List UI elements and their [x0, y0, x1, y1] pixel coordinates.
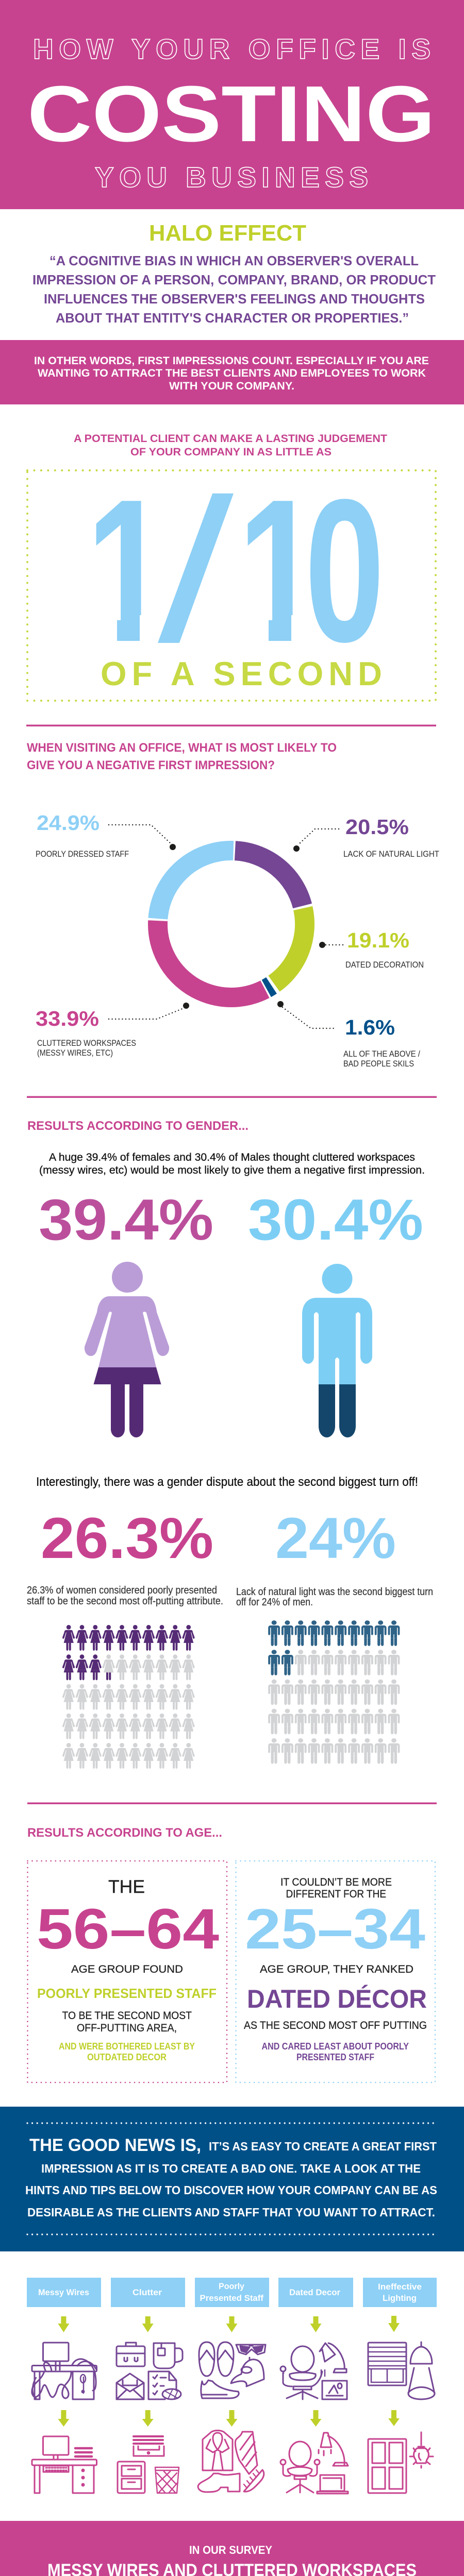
callout: poorly dressed staff: POORLY DRESSED STAFF	[36, 850, 129, 859]
text block: women second turn off	[27, 1585, 223, 1607]
callout: all of the above	[277, 1001, 420, 1069]
panel: header banner	[0, 0, 464, 209]
icon: tidy storage	[118, 2436, 179, 2493]
callout: poorly dressed staff	[36, 811, 176, 859]
heading: how your office is: HOW YOUR OFFICE IS	[33, 33, 430, 65]
callout: all of the above: 1.6%	[345, 1015, 395, 1039]
text block: potential client	[74, 433, 387, 458]
label box: clutter	[111, 2278, 185, 2307]
callout: poorly dressed staff: 24.9%	[37, 811, 100, 835]
icon: smart clothing	[198, 2431, 264, 2492]
icon: clutter items	[117, 2343, 183, 2399]
big number: 1/10: 1	[86, 456, 169, 684]
panel: one tenth of a second	[27, 456, 436, 701]
heading: costing: COSTING	[27, 70, 435, 158]
stat: female 39.4%: 39.4%	[39, 1188, 213, 1252]
text block: halo effect definition: “A COGNITIVE BIAS IN WHICH AN OBSERVER'S OVERALL	[49, 253, 419, 268]
big number: 1/10: 0	[305, 456, 385, 684]
panel: age group 25-34: AGE GROUP, THEY RANKED	[260, 1963, 413, 1975]
text block: halo effect definition: IMPRESSION OF A PERSON, COMPANY, BRAND, OR PRODUCT	[32, 272, 436, 287]
donut chart	[129, 822, 333, 1026]
panel: age group 25-34: PRESENTED STAFF	[296, 2052, 374, 2062]
label box: poorly presented staff: Poorly	[219, 2281, 245, 2291]
heading: results according to gender: RESULTS ACCORDING TO GENDER...	[27, 1119, 248, 1133]
text block: men second turn off: off for 24% of men.	[236, 1597, 313, 1608]
icon: messy wires desk	[32, 2343, 97, 2399]
big number: 1/10: 1	[238, 456, 320, 684]
panel: the good news band	[0, 2107, 464, 2251]
panel: age group 56-64: OFF-PUTTING AREA,	[77, 2022, 177, 2034]
text block: halo effect definition	[32, 253, 436, 326]
icon: bright window and bulb	[368, 2432, 433, 2493]
stat: 56-64: 56–64	[37, 1897, 219, 1961]
callout: dated decoration: DATED DECORATION	[345, 960, 424, 970]
text: the good news: THE GOOD NEWS IS,	[29, 2136, 201, 2155]
icon: tidy desk	[32, 2436, 97, 2493]
label box: dated decor: Dated Decor	[289, 2287, 340, 2297]
label box: messy wires: Messy Wires	[38, 2287, 89, 2297]
callout: lack of natural light	[293, 815, 439, 859]
panel: first impressions band	[0, 340, 464, 404]
label box: clutter: Clutter	[132, 2287, 162, 2297]
panel: age group 56-64: TO BE THE SECOND MOST	[62, 2010, 192, 2022]
text block: gender intro: (messy wires, etc) would be most likely to give them a negative first impression.	[39, 1164, 425, 1176]
text block: men second turn off	[236, 1586, 433, 1608]
text block: women second turn off: 26.3% of women considered poorly presented	[27, 1585, 217, 1596]
text block: halo effect definition: INFLUENCES THE OBSERVER'S FEELINGS AND THOUGHTS	[44, 291, 425, 307]
panel: the good news band: DESIRABLE AS THE CLIENTS AND STAFF THAT YOU WANT TO ATTRACT.	[27, 2206, 435, 2219]
caption: of a second: OF A SECOND	[101, 655, 382, 692]
panel: age group 56-64: AGE GROUP FOUND	[71, 1963, 183, 1975]
icon: casual clothing	[199, 2342, 266, 2398]
callout: all of the above: ALL OF THE ABOVE /	[343, 1049, 420, 1059]
text block: potential client: A POTENTIAL CLIENT CAN MAKE A LASTING JUDGEMENT	[74, 433, 387, 445]
panel: survey result band	[0, 2521, 464, 2576]
stat: women 26.3%: 26.3%	[41, 1506, 213, 1570]
panel: age group 56-64	[28, 1861, 227, 2082]
arrows: purple icons to pink icons	[58, 2410, 400, 2427]
panel: the good news band: HINTS AND TIPS BELOW TO DISCOVER HOW YOUR COMPANY CAN BE AS	[25, 2183, 437, 2197]
label box: messy wires	[27, 2278, 101, 2307]
panel: the good news band: IMPRESSION AS IT IS TO CREATE A BAD ONE. TAKE A LOOK AT THE	[41, 2162, 421, 2175]
panel: first impressions band: IN OTHER WORDS, FIRST IMPRESSIONS COUNT. ESPECIALLY IF YOU ARE	[34, 355, 429, 367]
text block: halo effect definition: ABOUT THAT ENTITY'S CHARACTER OR PROPERTIES.”	[56, 310, 409, 326]
stat: male 30.4%: 30.4%	[248, 1188, 423, 1252]
callout: cluttered workspaces	[36, 1003, 189, 1058]
question heading: WHEN VISITING AN OFFICE, WHAT IS MOST LIKELY TO	[27, 741, 337, 755]
arrows: boxes to purple icons	[58, 2316, 400, 2332]
text block: potential client: OF YOUR COMPANY IN AS LITTLE AS	[130, 446, 332, 458]
panel: age group 25-34: IT COULDN’T BE MORE	[280, 1876, 392, 1888]
text block: gender dispute: Interestingly, there was a gender dispute about the second biggest turn off!	[36, 1475, 418, 1489]
heading: you business: YOU BUSINESS	[95, 161, 368, 193]
icon: dated office furniture	[280, 2343, 347, 2399]
chart: men pictogram grid	[268, 1620, 400, 1764]
chart: women pictogram grid	[62, 1625, 195, 1769]
panel: age group 25-34: AND CARED LEAST ABOUT POORLY	[262, 2041, 409, 2052]
label box: ineffective lighting	[363, 2278, 437, 2307]
label box: poorly presented staff: Presented Staff	[200, 2293, 263, 2303]
text block: women second turn off: staff to be the second most off-putting attribute.	[27, 1596, 223, 1607]
panel: age group 25-34: DATED DÉCOR	[247, 1985, 427, 2013]
callout: dated decoration: 19.1%	[347, 928, 409, 952]
text block: gender intro	[39, 1151, 425, 1176]
panel: first impressions band: WANTING TO ATTRACT THE BEST CLIENTS AND EMPLOYEES TO WORK	[38, 367, 426, 379]
question heading	[27, 741, 337, 772]
panel: age group 56-64: THE	[108, 1877, 145, 1897]
icon: male figure	[302, 1264, 372, 1437]
panel: age group 25-34: AS THE SECOND MOST OFF PUTTING	[244, 2020, 427, 2031]
heading: results according to age: RESULTS ACCORDING TO AGE...	[27, 1826, 222, 1840]
callout: all of the above: BAD PEOPLE SKILS	[343, 1059, 414, 1069]
panel: age group 56-64: AND WERE BOTHERED LEAST BY	[59, 2041, 195, 2052]
stat: 25-34: 25–34	[245, 1897, 425, 1961]
callout: cluttered workspaces: CLUTTERED WORKSPACES	[37, 1039, 136, 1048]
label box: ineffective lighting: Ineffective	[378, 2282, 422, 2292]
panel: age group 25-34: DIFFERENT FOR THE	[286, 1888, 386, 1900]
heading: halo effect: HALO EFFECT	[149, 221, 306, 246]
callout: dated decoration	[319, 928, 424, 970]
panel: age group 25-34	[236, 1861, 435, 2082]
panel: age group 56-64: OUTDATED DECOR	[87, 2052, 167, 2062]
label box: poorly presented staff	[195, 2278, 269, 2307]
callout: lack of natural light: 20.5%	[345, 815, 409, 839]
panel: the good news band: IT’S AS EASY TO CREATE A GREAT FIRST	[209, 2140, 437, 2153]
question heading: GIVE YOU A NEGATIVE FIRST IMPRESSION?	[27, 758, 275, 772]
icon: modern office furniture	[280, 2433, 348, 2494]
text block: gender intro: A huge 39.4% of females and 30.4% of Males thought cluttered workspaces	[49, 1151, 415, 1163]
panel: survey result band: IN OUR SURVEY	[189, 2544, 272, 2556]
callout: cluttered workspaces: (MESSY WIRES, ETC)	[37, 1048, 113, 1058]
callout: cluttered workspaces: 33.9%	[36, 1007, 99, 1030]
text block: men second turn off: Lack of natural light was the second biggest turn	[236, 1586, 433, 1598]
stat: men 24%: 24%	[275, 1506, 396, 1570]
label box: dated decor	[278, 2278, 353, 2307]
big number: 1/10: /	[158, 456, 235, 684]
callout: lack of natural light: LACK OF NATURAL LIGHT	[343, 850, 439, 859]
big number: 1/10	[86, 456, 385, 684]
icon: window blind and dim lamp	[368, 2342, 435, 2399]
panel: first impressions band: WITH YOUR COMPANY.	[169, 380, 294, 392]
panel: age group 56-64: POORLY PRESENTED STAFF	[37, 1986, 217, 2001]
icon: female figure	[85, 1262, 169, 1437]
label box: ineffective lighting: Lighting	[383, 2293, 417, 2303]
